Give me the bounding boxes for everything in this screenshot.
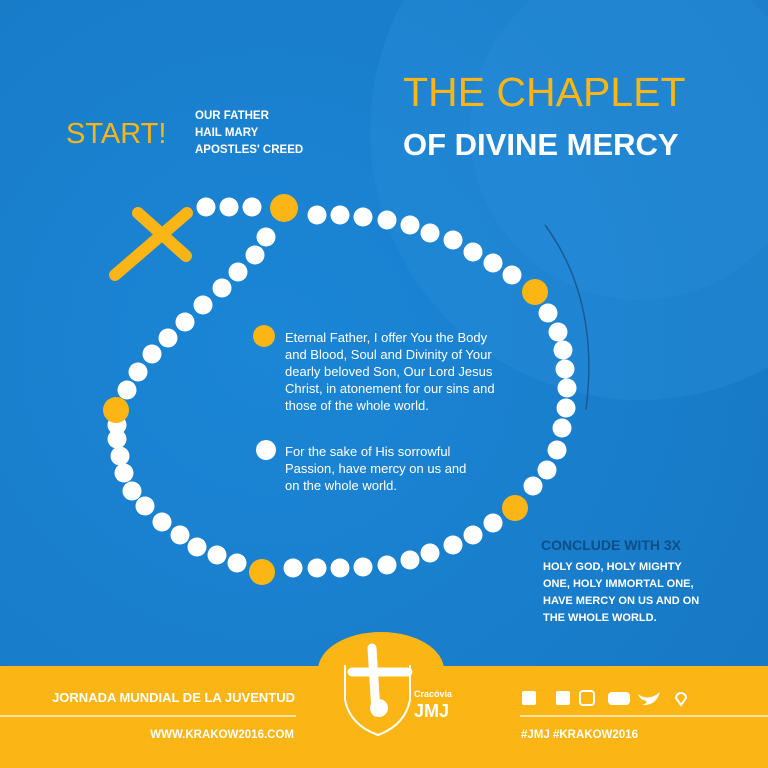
conclude block: ONE, HOLY IMMORTAL ONE, bbox=[543, 578, 694, 590]
legend: yellow bead prayer: dearly beloved Son, Our Lord Jesus bbox=[285, 364, 493, 379]
start label: START! bbox=[66, 118, 166, 150]
start label bbox=[66, 110, 303, 156]
legend: yellow bead prayer: Eternal Father, I offer You the Body bbox=[285, 330, 488, 345]
logo: JMJ Krakow: Cracóvia bbox=[414, 689, 453, 699]
footer: JORNADA MUNDIAL DE LA JUVENTUD bbox=[52, 690, 295, 705]
logo: JMJ Krakow: JMJ bbox=[414, 701, 449, 721]
conclude block: THE WHOLE WORLD. bbox=[543, 612, 657, 624]
legend: white bead prayer bbox=[256, 440, 466, 493]
title bbox=[403, 69, 686, 162]
footer: WWW.KRAKOW2016.COM bbox=[150, 729, 294, 741]
legend: white bead prayer: on the whole world. bbox=[285, 478, 397, 493]
conclude block: HAVE MERCY ON US AND ON bbox=[543, 595, 699, 607]
footer bbox=[0, 632, 768, 768]
legend: yellow bead prayer: Christ, in atonement for our sins and bbox=[285, 381, 495, 396]
social icons bbox=[522, 691, 686, 705]
footer: #JMJ #KRAKOW2016 bbox=[521, 729, 638, 741]
arrow: direction arc bbox=[545, 225, 589, 410]
title: THE CHAPLET bbox=[403, 69, 686, 115]
logo: JMJ Krakow bbox=[345, 648, 453, 735]
conclude block: CONCLUDE WITH 3X bbox=[541, 537, 682, 553]
icon: cross bbox=[115, 213, 187, 275]
conclude block bbox=[541, 537, 699, 624]
rosary beads bbox=[108, 198, 576, 578]
start label: OUR FATHER bbox=[195, 110, 270, 122]
title: OF DIVINE MERCY bbox=[403, 127, 679, 162]
legend: white bead prayer: For the sake of His sorrowful bbox=[285, 444, 451, 459]
legend: yellow bead prayer bbox=[253, 325, 495, 413]
conclude block: HOLY GOD, HOLY MIGHTY bbox=[543, 561, 682, 573]
start label: HAIL MARY bbox=[195, 127, 259, 139]
legend: yellow bead prayer: and Blood, Soul and Divinity of Your bbox=[285, 347, 492, 362]
legend: yellow bead prayer: those of the whole world. bbox=[285, 398, 429, 413]
legend: white bead prayer: Passion, have mercy on us and bbox=[285, 461, 466, 476]
start label: APOSTLES' CREED bbox=[195, 144, 303, 156]
